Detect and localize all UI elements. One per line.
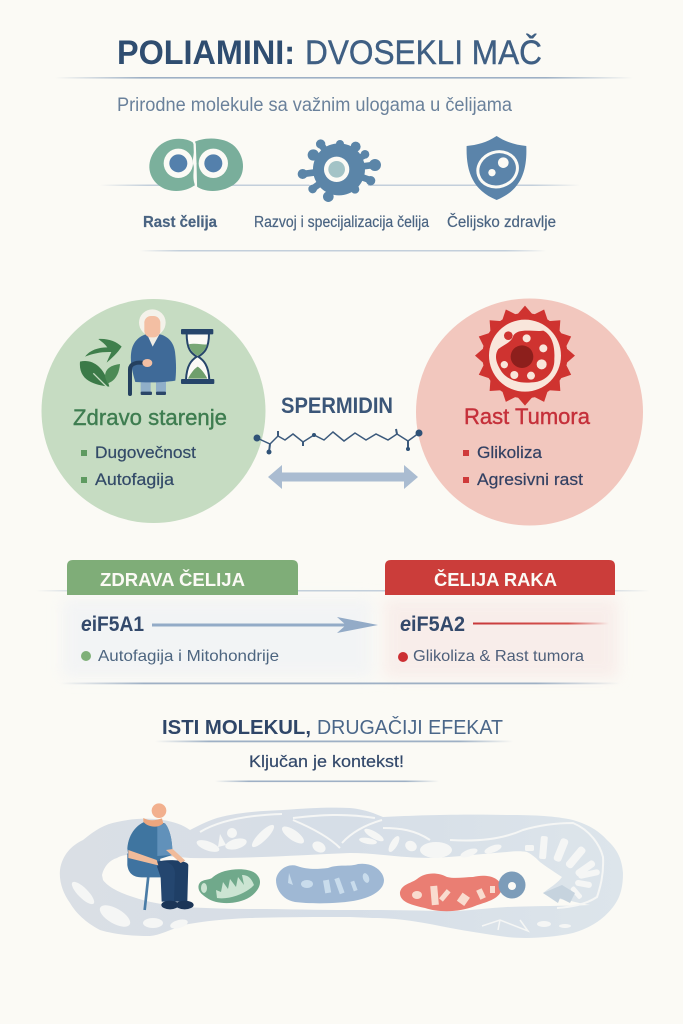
icon: differentiating cell (298, 136, 381, 203)
panel: healthy cell header: ZDRAVA ČELIJA (100, 569, 245, 590)
panel: healthy cell header (67, 560, 298, 595)
subtitle: Prirodne molekule sa važnim ulogama u čelijama (117, 95, 512, 116)
cell inner channel (102, 851, 590, 911)
icon labels: Razvoj i specijalizacija čelija (254, 214, 429, 231)
icon labels (143, 214, 556, 231)
panel: cancer cell header (385, 560, 615, 595)
heading: healthy aging: Zdravo starenje (73, 405, 227, 430)
blue mitochondrion (276, 864, 384, 903)
eIF5A1 label: eiF5A1 (81, 613, 144, 636)
icon: hourglass (181, 329, 214, 384)
list: healthy aging (81, 443, 196, 489)
icon: cell division (149, 137, 243, 191)
molecule chain (254, 429, 422, 454)
cell membrane and vesicles (69, 814, 603, 931)
healthy pathway text: Autofagija i Mitohondrije (98, 648, 279, 665)
panel: tumor growth (416, 298, 643, 526)
icon: tumor cell (475, 306, 575, 406)
icon labels: Čelijsko zdravlje (447, 214, 556, 231)
icon labels: Rast čelija (143, 214, 217, 231)
green mitochondrion (198, 869, 260, 903)
conclusion heading: ISTI MOLEKUL, (162, 717, 311, 739)
title (117, 34, 542, 72)
conclusion subtext: Ključan je kontekst! (249, 752, 404, 771)
panel: cancer cell header: ČELIJA RAKA (434, 569, 557, 590)
conclusion heading (162, 716, 503, 739)
icon: leaves (80, 339, 122, 392)
icon: shield with cell (467, 136, 526, 200)
illustration: cell pathway (60, 808, 623, 938)
soft comparison panels (62, 598, 618, 678)
spermidine label: SPERMIDIN (281, 393, 393, 418)
red mitochondrion (400, 873, 502, 911)
icon: seated elderly man (127, 803, 194, 910)
double arrow (268, 465, 418, 489)
panel: healthy aging (42, 299, 266, 523)
arrow: eIF5A1 to eIF5A2 (152, 617, 378, 633)
list: tumor growth: Glikoliza (477, 443, 543, 462)
icon: elderly person (130, 309, 176, 395)
eIF5A2 label: eiF5A2 (400, 613, 465, 636)
list: healthy aging: Autofagija (95, 470, 175, 489)
conclusion heading: DRUGAČIJI EFEKAT (317, 716, 503, 739)
list: healthy aging: Dugovečnost (95, 443, 196, 462)
blue organelle (498, 872, 526, 898)
heading: tumor growth: Rast Tumora (464, 404, 590, 429)
cell outer body (60, 808, 623, 938)
list: tumor growth (463, 443, 583, 489)
cancer pathway text: Glikoliza & Rast tumora (413, 648, 584, 665)
list: tumor growth: Agresivni rast (477, 470, 583, 489)
fan base (543, 885, 575, 903)
red line (473, 622, 609, 624)
title: DVOSEKLI MAČ (305, 34, 542, 72)
title: POLIAMINI: (117, 34, 295, 72)
